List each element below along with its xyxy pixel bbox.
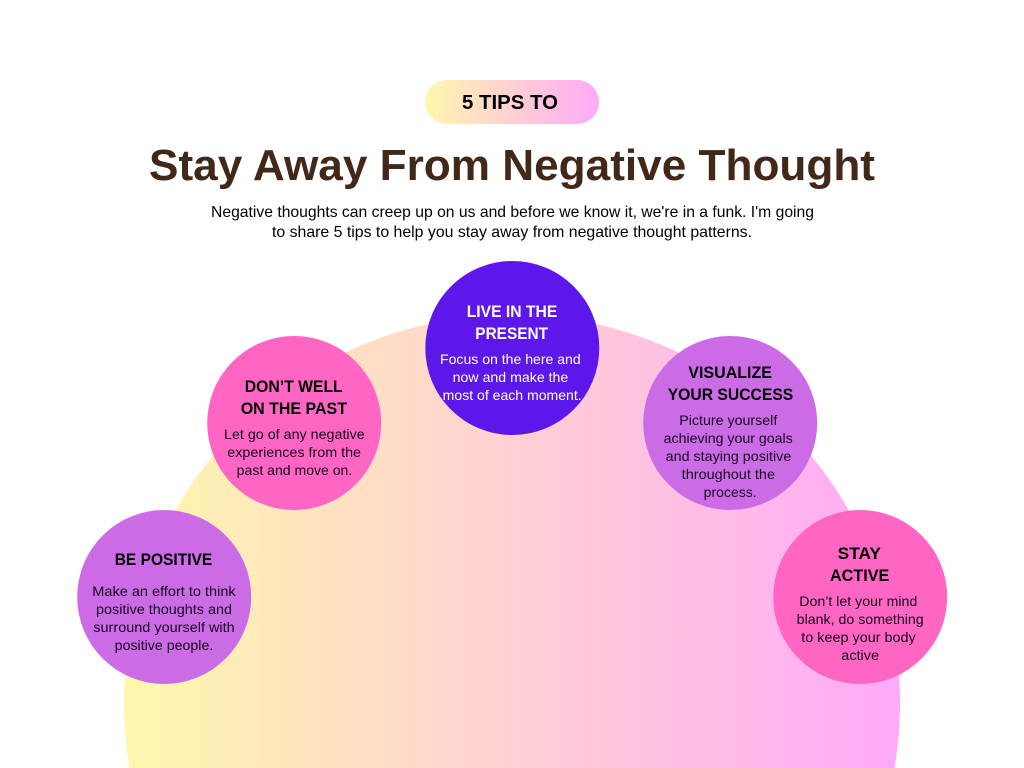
tip 3: live in the present: LIVE IN THE xyxy=(467,303,557,321)
tip 4: visualize your success: throughout the xyxy=(682,467,775,482)
tip 5: stay active: blank, do something xyxy=(797,612,924,627)
tip 2: don't well on the past: Let go of any negative xyxy=(224,427,365,442)
tip 2: don't well on the past: past and move on. xyxy=(237,463,352,478)
tip 1: be positive xyxy=(77,510,251,684)
tip 2: don't well on the past: DON’T WELL xyxy=(245,378,343,396)
tip 4: visualize your success: Picture yourself xyxy=(679,413,777,428)
tip 4: visualize your success: YOUR SUCCESS xyxy=(668,386,793,404)
tip 3: live in the present: Focus on the here and xyxy=(440,352,581,367)
tip 5: stay active xyxy=(773,510,947,684)
tip 3: live in the present: PRESENT xyxy=(475,325,548,343)
title: Stay Away From Negative Thought xyxy=(149,141,875,190)
tip 3: live in the present: now and make the xyxy=(453,370,568,385)
tip 4: visualize your success: VISUALIZE xyxy=(688,364,772,382)
tip 2: don't well on the past: ON THE PAST xyxy=(241,400,347,418)
tip 1: be positive: surround yourself with xyxy=(93,620,235,635)
intro text: to share 5 tips to help you stay away from negative thought patterns. xyxy=(272,224,752,241)
intro text xyxy=(211,204,814,241)
tip 5: stay active: Don’t let your mind xyxy=(799,594,917,609)
intro text: Negative thoughts can creep up on us and before we know it, we're in a funk. I'm going xyxy=(211,204,814,221)
tip 4: visualize your success: and staying positive xyxy=(666,449,791,464)
tip 2: don't well on the past xyxy=(207,336,381,510)
tip 3: live in the present xyxy=(425,261,599,435)
tip 4: visualize your success: achieving your goals xyxy=(664,431,793,446)
tip 5: stay active: ACTIVE xyxy=(830,567,889,585)
tip 5: stay active: STAY xyxy=(838,545,881,563)
tip 3: live in the present: most of each moment. xyxy=(443,388,582,403)
tip 2: don't well on the past: experiences from the xyxy=(227,445,361,460)
tip 1: be positive: Make an effort to think xyxy=(92,584,236,599)
tip 5: stay active: to keep your body xyxy=(801,630,916,645)
tip 4: visualize your success: process. xyxy=(704,485,757,500)
tip 1: be positive: BE POSITIVE xyxy=(115,551,212,569)
tip 5: stay active: active xyxy=(841,648,879,663)
tip 1: be positive: positive people. xyxy=(115,638,213,653)
badge: 5 tips to xyxy=(425,80,599,124)
tip 1: be positive: positive thoughts and xyxy=(96,602,232,617)
badge: 5 tips to: 5 TIPS TO xyxy=(462,92,558,114)
tip 4: visualize your success xyxy=(643,336,817,510)
background gradient semicircle xyxy=(124,315,900,768)
